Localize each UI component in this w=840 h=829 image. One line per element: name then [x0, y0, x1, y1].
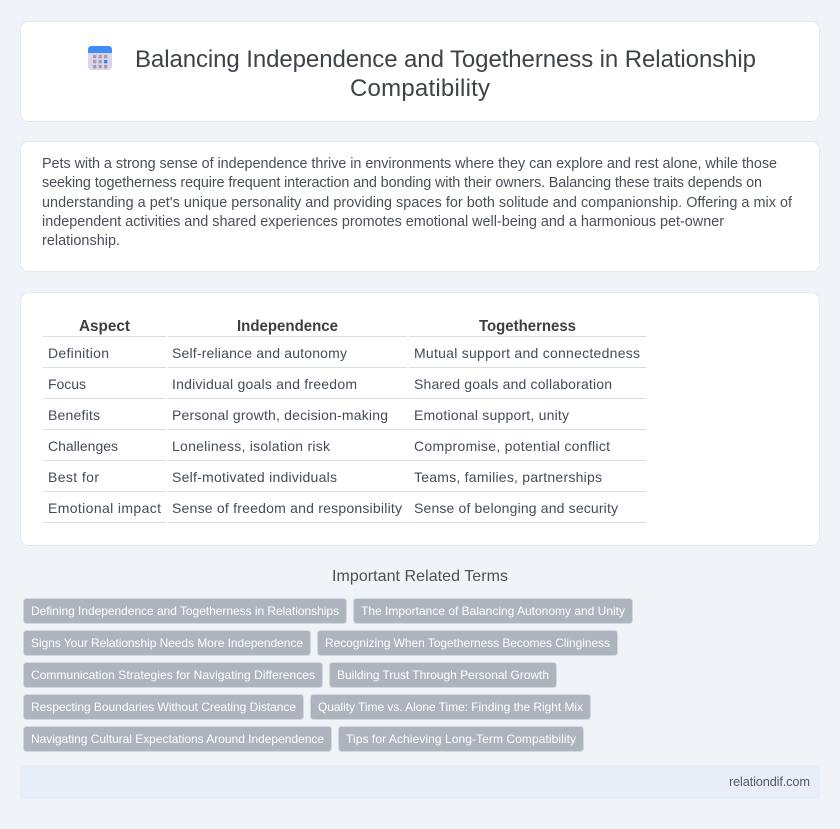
table header: Independence [237, 318, 338, 335]
tag [330, 662, 556, 688]
table row: focus: Focus [48, 376, 86, 392]
footer: relationdif.com [729, 774, 810, 789]
table row: challenges [48, 438, 610, 454]
tag [24, 662, 322, 688]
table header: Togetherness [479, 318, 576, 335]
tag [310, 694, 590, 720]
table row: emotional impact: Emotional impact [48, 500, 161, 516]
table row: best for [48, 469, 602, 485]
icon: calendar [88, 46, 112, 70]
tag [338, 726, 584, 752]
tag: Respecting Boundaries Without Creating Distance [31, 700, 296, 714]
tag: Signs Your Relationship Needs More Independence [31, 636, 303, 650]
tag [318, 630, 618, 656]
tag: Recognizing When Togetherness Becomes Clinginess [325, 636, 610, 650]
tag: Communication Strategies for Navigating Differences [31, 668, 315, 682]
text block: introduction: independent activities and shared experiences promotes emotional well-being and a harmonious pet-owner [42, 214, 724, 230]
table row: best for: Best for [48, 469, 99, 485]
table row: definition: Mutual support and connectedness [414, 345, 640, 361]
text block: introduction: Pets with a strong sense of independence thrive in environments where they can explore and rest alone, while those [42, 156, 777, 172]
title: Balancing Independence and Togetherness in Relationship [135, 46, 756, 73]
table row: benefits [48, 407, 569, 423]
tag [24, 726, 332, 752]
tag: The Importance of Balancing Autonomy and Unity [361, 604, 625, 618]
tag: Navigating Cultural Expectations Around Independence [31, 732, 324, 746]
table row: benefits: Emotional support, unity [414, 407, 569, 423]
table row: challenges: Loneliness, isolation risk [172, 438, 331, 454]
table row: best for: Teams, families, partnerships [414, 469, 602, 485]
text block: introduction [42, 156, 793, 249]
panel: comparison table [20, 292, 820, 546]
table header: Aspect [79, 318, 131, 335]
footer [20, 765, 820, 799]
tag: Defining Independence and Togetherness in Relationships [31, 604, 339, 618]
tag [24, 630, 310, 656]
table row: benefits: Personal growth, decision-making [172, 407, 388, 423]
table row: definition [48, 345, 640, 361]
table header [79, 318, 576, 335]
table row: emotional impact [48, 500, 618, 516]
table row: focus [48, 376, 612, 392]
table row: definition: Definition [48, 345, 109, 361]
table row: focus: Individual goals and freedom [172, 376, 357, 392]
panel: introduction [20, 142, 820, 272]
tag [24, 598, 346, 624]
text block: introduction: relationship. [42, 233, 120, 249]
table row: definition: Self-reliance and autonomy [172, 345, 347, 361]
table row: focus: Shared goals and collaboration [414, 376, 612, 392]
panel: header [20, 22, 820, 122]
tag: Building Trust Through Personal Growth [337, 668, 549, 682]
tag [354, 598, 632, 624]
table row: benefits: Benefits [48, 407, 100, 423]
table row: emotional impact: Sense of freedom and responsibility [172, 500, 402, 516]
title: Compatibility [350, 75, 490, 102]
table row: emotional impact: Sense of belonging and security [414, 500, 618, 516]
text block: introduction: seeking togetherness require frequent interaction and bonding with their owners. Balancing these traits depends on [42, 175, 762, 191]
tag: Quality Time vs. Alone Time: Finding the Right Mix [318, 700, 583, 714]
tag [24, 694, 304, 720]
text block: introduction: understanding a pet's unique personality and providing spaces for both solitude and companionship. Offering a mix of [42, 195, 793, 211]
table row: best for: Self-motivated individuals [172, 469, 337, 485]
tag group: related terms [24, 598, 632, 752]
title [135, 46, 756, 102]
heading: important related terms: Important Related Terms [332, 568, 508, 585]
table row: challenges: Compromise, potential conflict [414, 438, 610, 454]
tag: Tips for Achieving Long-Term Compatibility [346, 732, 576, 746]
table row: challenges: Challenges [48, 438, 118, 454]
